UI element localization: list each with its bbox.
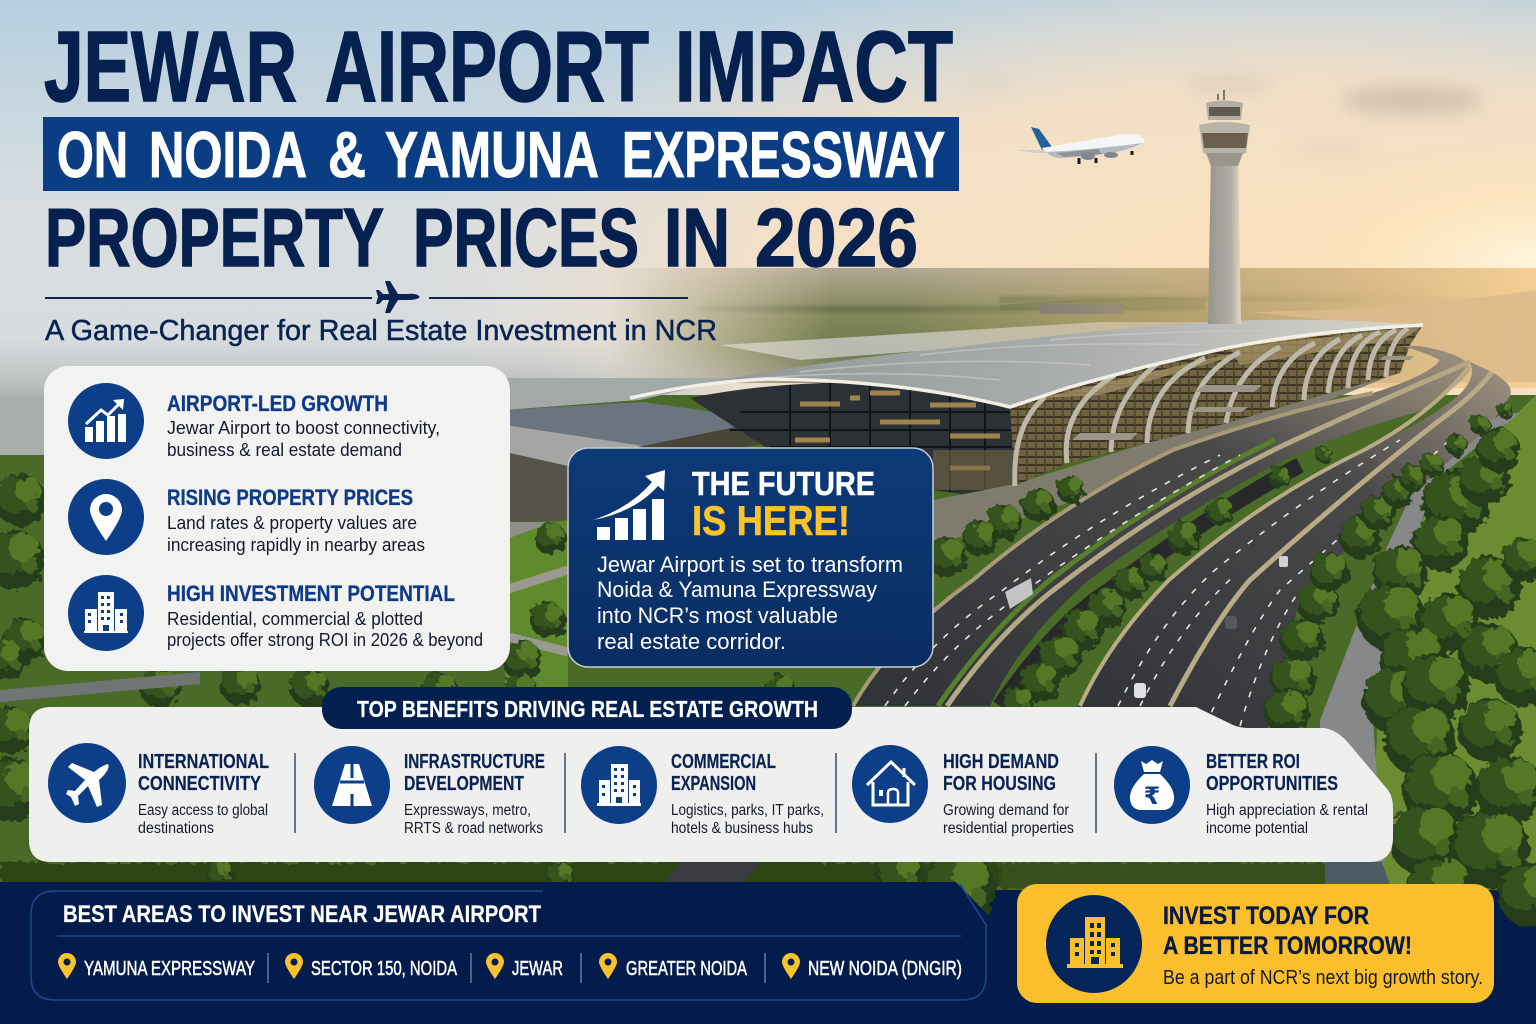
- panel: key points: [44, 366, 510, 671]
- text: high investment potential: HIGH INVESTMENT POTENTIAL: [167, 581, 455, 606]
- body text: [597, 552, 903, 654]
- benefits heading pill: TOP BENEFITS DRIVING REAL ESTATE GROWTH: [357, 696, 818, 722]
- terminal plaza: [933, 362, 1425, 545]
- benefit: international connectivity: CONNECTIVITY: [138, 773, 262, 795]
- sun glow: [1236, 132, 1536, 392]
- title highlight bar: YAMUNA: [385, 118, 599, 191]
- text: airport-led growth: [167, 391, 440, 460]
- text: airport-led growth: business & real estate demand: [167, 440, 402, 460]
- icon: money bag: [1114, 746, 1190, 824]
- panel: top benefits: [29, 687, 1393, 862]
- location list: NEW NOIDA (DNGIR): [808, 958, 962, 980]
- benefit: commercial expansion: Logistics, parks, IT parks,: [671, 802, 824, 819]
- benefit: infrastructure development: INFRASTRUCTURE: [404, 751, 545, 773]
- icon: rising chart arrow: [593, 470, 665, 540]
- icon: house: [852, 745, 928, 823]
- benefit: better ROI opportunities: OPPORTUNITIES: [1206, 773, 1338, 795]
- benefit: infrastructure development: DEVELOPMENT: [404, 773, 524, 795]
- clouds: [966, 77, 1484, 153]
- title highlight bar: EXPRESSWAY: [622, 118, 945, 191]
- text: rising property prices: RISING PROPERTY PRICES: [167, 485, 413, 510]
- title highlight bar: &: [328, 118, 366, 191]
- airplane: [1017, 127, 1145, 164]
- benefits heading pill: [322, 687, 852, 729]
- icon: growth chart: [68, 383, 144, 459]
- benefit: international connectivity: INTERNATIONAL: [138, 751, 269, 773]
- benefit: better ROI opportunities: BETTER ROI: [1206, 751, 1300, 773]
- icon: plane: [48, 743, 126, 823]
- divider with plane icon: [45, 281, 688, 313]
- benefit: high demand for housing: residential properties: [943, 820, 1074, 837]
- callout text: Be a part of NCR’s next big growth story.: [1163, 967, 1483, 989]
- callout text: A BETTER TOMORROW!: [1163, 932, 1412, 960]
- benefit: international connectivity: [48, 743, 269, 837]
- icon: buildings on navy circle: [1046, 895, 1142, 993]
- left haze over ground: [0, 350, 709, 395]
- title line 1: IMPACT: [675, 11, 953, 123]
- benefit: commercial expansion: EXPANSION: [671, 773, 756, 795]
- text: high investment potential: Residential, commercial & plotted: [167, 609, 423, 629]
- benefit: better ROI opportunities: [1114, 746, 1368, 837]
- sky: [0, 0, 1536, 400]
- subtitle: A Game-Changer for Real Estate Investment in NCR: [45, 315, 717, 347]
- title line 1: AIRPORT: [325, 11, 649, 123]
- title line 3: IN: [664, 191, 730, 284]
- body text: real estate corridor.: [597, 629, 786, 654]
- benefit: high demand for housing: Growing demand for: [943, 802, 1069, 819]
- terminal roof: [630, 320, 1423, 407]
- panel: best areas to invest: [0, 882, 1536, 1024]
- body text: Noida & Yamuna Expressway: [597, 577, 878, 602]
- title line 3: 2026: [755, 191, 918, 284]
- callout text: INVEST TODAY FOR: [1163, 902, 1369, 930]
- benefit: international connectivity: destinations: [138, 820, 214, 837]
- roadside trees: [502, 402, 1536, 927]
- benefit: better ROI opportunities: High appreciation & rental: [1206, 802, 1368, 819]
- benefit: high demand for housing: [852, 745, 1074, 837]
- title highlight bar: [43, 117, 959, 191]
- title highlight bar: NOIDA: [149, 118, 307, 191]
- callout text: [1163, 902, 1483, 989]
- terminal glass front: [690, 381, 1016, 497]
- text: airport-led growth: Jewar Airport to boost connectivity,: [167, 418, 440, 438]
- expressway roads: [853, 346, 1511, 730]
- benefit: commercial expansion: COMMERCIAL: [671, 751, 776, 773]
- benefit: high demand for housing: HIGH DEMAND: [943, 751, 1059, 773]
- text: high investment potential: [167, 581, 483, 650]
- ground greenery: [0, 395, 1536, 890]
- benefit: high demand for housing: FOR HOUSING: [943, 773, 1056, 795]
- text: rising property prices: increasing rapidly in nearby areas: [167, 535, 425, 555]
- title line 3: [45, 191, 918, 284]
- icon: money bag: ₹: [1144, 782, 1160, 810]
- text: high investment potential: projects offer strong ROI in 2026 & beyond: [167, 630, 483, 650]
- terminal arched facade: [1010, 325, 1423, 486]
- benefit: infrastructure development: Expressways, metro,: [404, 802, 531, 819]
- distant land: [622, 268, 1536, 388]
- benefit: commercial expansion: [581, 746, 824, 837]
- body text: into NCR’s most valuable: [597, 603, 838, 628]
- icon: location pin: [68, 479, 144, 555]
- benefit: infrastructure development: RRTS & road networks: [404, 820, 543, 837]
- footpath: [1320, 413, 1520, 885]
- heading: THE FUTURE: [692, 465, 875, 502]
- body text: Jewar Airport is set to transform: [597, 552, 903, 577]
- title line 3: PRICES: [413, 191, 639, 284]
- title line 1: [44, 11, 953, 123]
- location list: SECTOR 150, NOIDA: [311, 958, 457, 980]
- text: airport-led growth: AIRPORT-LED GROWTH: [167, 391, 388, 416]
- benefit: infrastructure development: [314, 746, 545, 837]
- benefit: better ROI opportunities: income potential: [1206, 820, 1308, 837]
- location list: JEWAR: [512, 958, 563, 980]
- benefit: commercial expansion: hotels & business hubs: [671, 820, 813, 837]
- panel: the future is here: [568, 448, 933, 667]
- control tower: [1199, 90, 1250, 324]
- benefit: international connectivity: Easy access to global: [138, 802, 268, 819]
- text: rising property prices: Land rates & property values are: [167, 513, 417, 533]
- callout: invest today: [1017, 884, 1494, 1003]
- heading: [692, 465, 875, 544]
- icon: road: [314, 746, 390, 824]
- icon: buildings: [581, 746, 657, 824]
- location list: GREATER NOIDA: [626, 958, 747, 980]
- title line 1: JEWAR: [44, 11, 297, 123]
- low terminal wing: [505, 378, 770, 690]
- icon: buildings: [68, 575, 144, 651]
- location list: YAMUNA EXPRESSWAY: [84, 958, 255, 980]
- title line 3: PROPERTY: [45, 191, 384, 284]
- location list: [58, 953, 962, 983]
- text: rising property prices: [167, 485, 425, 555]
- title: [43, 11, 959, 284]
- heading: BEST AREAS TO INVEST NEAR JEWAR AIRPORT: [63, 901, 541, 928]
- title highlight bar: ON: [57, 118, 128, 191]
- left trees: [0, 474, 1330, 926]
- heading: IS HERE!: [692, 497, 850, 544]
